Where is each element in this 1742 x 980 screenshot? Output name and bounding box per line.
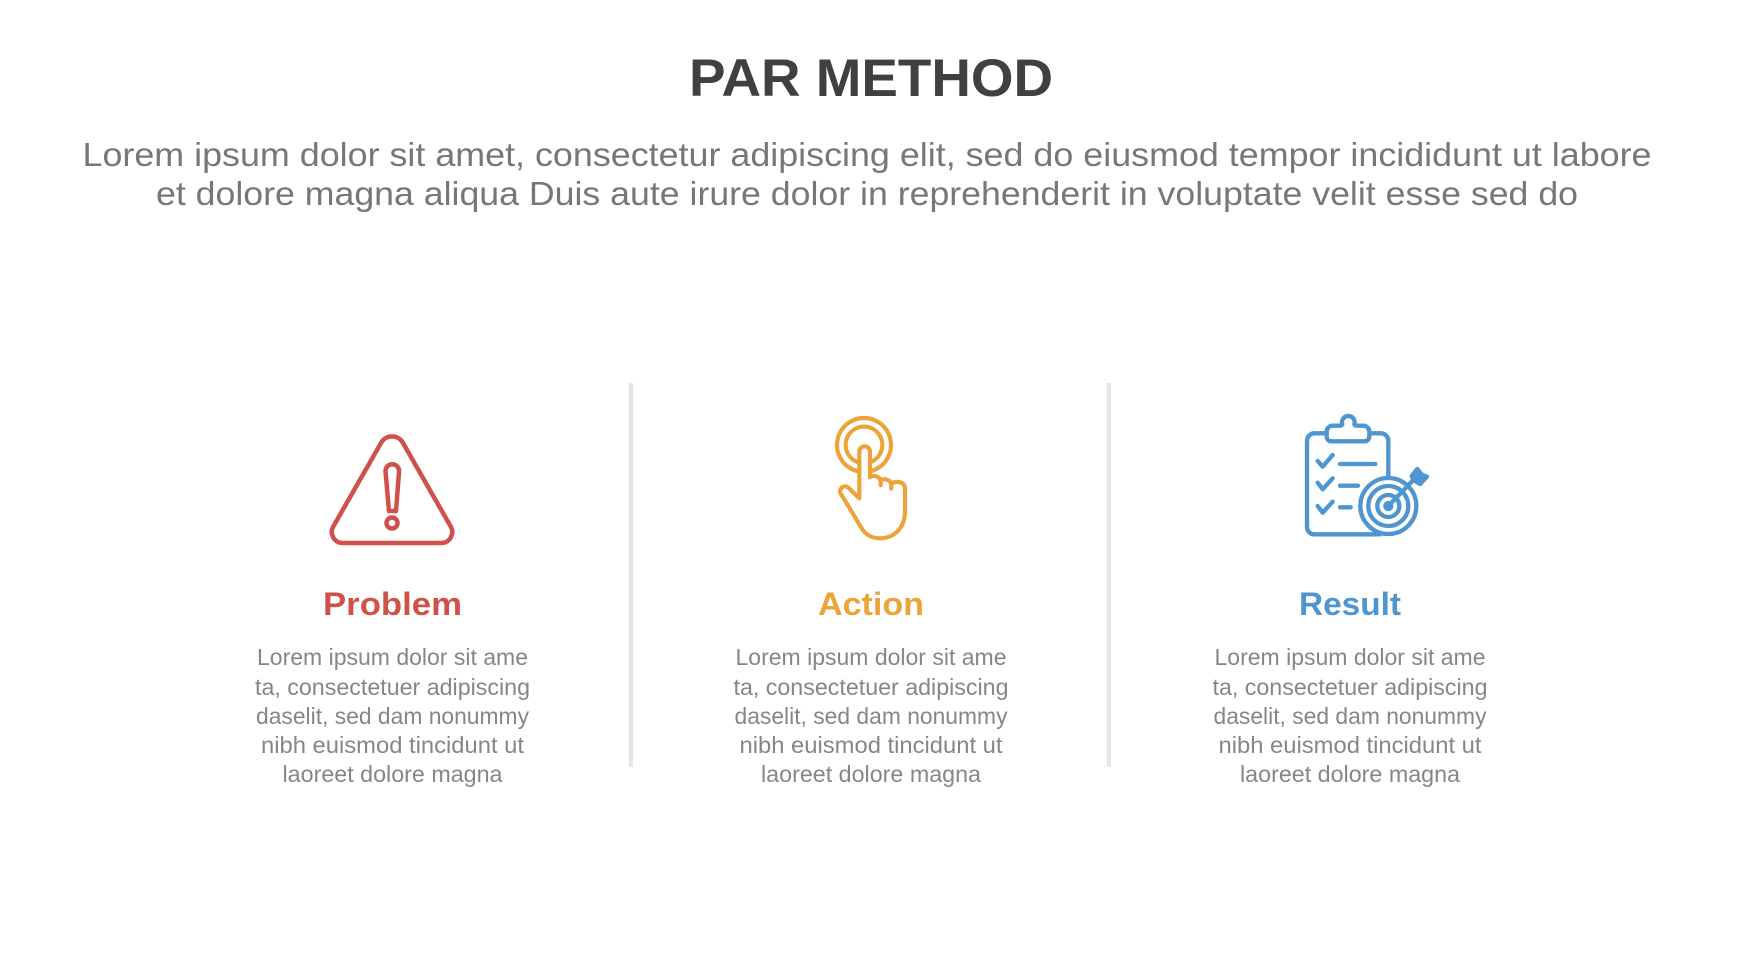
text block: result description: ta, consectetuer adipiscing [1212,674,1488,700]
icon: warning triangle [332,436,452,543]
text block: problem description: nibh euismod tincidunt ut [261,732,525,758]
text block: action description: daselit, sed dam nonummy [734,703,1008,729]
text block: problem description: Lorem ipsum dolor sit ame [257,644,528,670]
text block: action description [734,644,1008,787]
subtitle text block: Lorem ipsum dolor sit amet, consectetur adipiscing elit, sed do eiusmod tempor incididunt ut labore [82,136,1651,173]
icon: clipboard with target [1307,416,1427,534]
heading: problem: Problem [323,586,462,622]
text block: result description: Lorem ipsum dolor sit ame [1214,644,1486,670]
text block: action description: Lorem ipsum dolor sit ame [736,644,1006,670]
text block: action description: ta, consectetuer adipiscing [734,674,1008,700]
text block: problem description: ta, consectetuer adipiscing [255,674,530,700]
icon: hand tapping [837,418,905,538]
title: PAR METHOD [689,49,1053,108]
heading: result: Result [1299,586,1401,622]
text block: problem description [255,644,530,787]
subtitle text block: et dolore magna aliqua Duis aute irure dolor in reprehenderit in voluptate velit esse sed do [156,175,1578,212]
text block: result description: laoreet dolore magna [1240,761,1460,787]
text block: result description: daselit, sed dam nonummy [1214,703,1487,729]
text block: problem description: laoreet dolore magna [282,761,503,787]
panel: problem [255,436,530,787]
subtitle text block [82,136,1651,212]
heading: action: Action [818,586,924,622]
panel: action [734,418,1008,787]
text block: action description: laoreet dolore magna [761,761,981,787]
text block: result description: nibh euismod tincidunt ut [1218,732,1482,758]
panel: result [1212,416,1488,787]
text block: action description: nibh euismod tincidunt ut [740,732,1003,758]
text block: problem description: daselit, sed dam nonummy [256,703,529,729]
text block: result description [1212,644,1488,787]
